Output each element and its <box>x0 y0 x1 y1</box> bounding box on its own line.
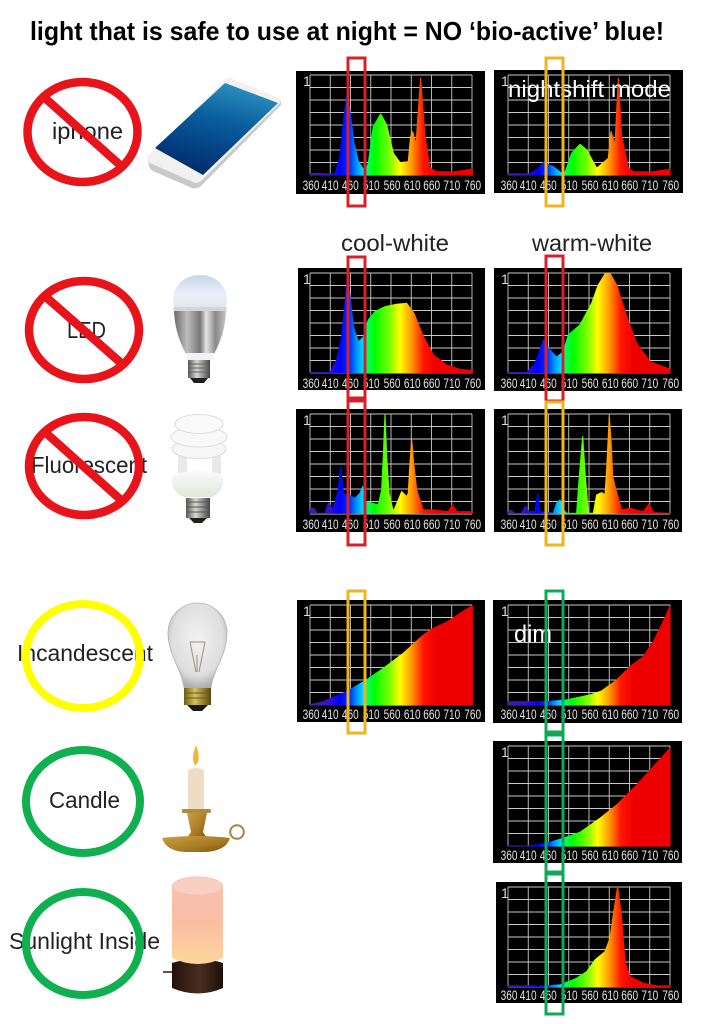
chart: fluorescent warm-white: 1 <box>501 412 509 428</box>
row: Fluorescent label: Fluorescent <box>31 452 148 478</box>
chart: sunlight inside: 610 <box>602 987 619 1003</box>
icon: incandescent bulb <box>168 603 227 711</box>
chart: fluorescent warm-white: 760 <box>662 516 679 532</box>
chart: iphone: 410 <box>322 177 339 193</box>
chart: fluorescent warm-white: 510 <box>561 516 578 532</box>
heading: warm-white: warm-white <box>531 230 652 256</box>
chart: incandescent dim: 1 <box>501 603 509 619</box>
chart: LED cool-white: 560 <box>384 375 401 391</box>
row: LED label <box>29 281 139 379</box>
chart: nightshift mode: 410 <box>520 177 537 193</box>
chart: incandescent dim: 560 <box>582 706 599 722</box>
chart: fluorescent cool-white: 760 <box>464 516 481 532</box>
chart: nightshift mode: nightshift mode <box>508 76 671 102</box>
icon: phone <box>147 78 281 188</box>
chart: incandescent dim: 510 <box>561 706 578 722</box>
chart: sunlight inside: 510 <box>561 987 578 1003</box>
chart: iphone: 510 <box>363 177 380 193</box>
chart: LED warm-white: 360 <box>501 375 518 391</box>
chart: incandescent dim: 760 <box>662 706 679 722</box>
chart: nightshift mode: 360 <box>501 177 518 193</box>
row: Sunlight Inside label <box>9 892 160 995</box>
chart: fluorescent cool-white: 660 <box>423 516 440 532</box>
chart: incandescent: 460 <box>342 706 359 722</box>
chart: fluorescent cool-white: 710 <box>443 516 460 532</box>
chart: LED cool-white: 660 <box>423 375 440 391</box>
row: Fluorescent label <box>29 417 148 515</box>
chart: sunlight inside: 560 <box>582 987 599 1003</box>
chart: sunlight inside: 410 <box>520 987 537 1003</box>
chart: incandescent <box>297 600 485 722</box>
chart: incandescent dim: 460 <box>540 706 557 722</box>
highlight boxes: blue band markers <box>348 58 563 1014</box>
icon: CFL spiral bulb <box>171 414 227 523</box>
chart: nightshift mode <box>494 70 683 193</box>
chart: LED cool-white: 410 <box>322 375 339 391</box>
chart: fluorescent cool-white: 560 <box>384 516 401 532</box>
chart: fluorescent cool-white <box>296 409 485 532</box>
chart: LED warm-white: 660 <box>621 375 638 391</box>
chart: candle: 760 <box>662 847 679 863</box>
chart: sunlight inside: 710 <box>641 987 658 1003</box>
row: Candle label <box>26 750 140 853</box>
chart: incandescent: 560 <box>384 706 401 722</box>
chart: candle: 1 <box>501 744 509 760</box>
chart: iphone: 460 <box>342 177 359 193</box>
chart: nightshift mode: 510 <box>561 177 578 193</box>
row: Incandescent label <box>17 604 154 708</box>
row: iphone label: iphone <box>52 118 123 144</box>
chart: iphone: 660 <box>423 177 440 193</box>
chart: iphone: 1 <box>303 73 311 89</box>
chart: fluorescent cool-white: 610 <box>404 516 421 532</box>
chart: incandescent: 360 <box>303 706 320 722</box>
chart: fluorescent cool-white: 1 <box>303 412 311 428</box>
chart: incandescent dim <box>493 600 682 723</box>
chart: LED warm-white: 710 <box>641 375 658 391</box>
chart: incandescent: 610 <box>404 706 421 722</box>
chart: candle: 410 <box>520 847 537 863</box>
chart: fluorescent cool-white: 410 <box>322 516 339 532</box>
chart: nightshift mode: 1 <box>501 73 509 89</box>
chart: fluorescent warm-white: 460 <box>540 516 557 532</box>
chart: incandescent: 1 <box>303 603 311 619</box>
heading: cool-white: cool-white <box>341 230 449 256</box>
chart: LED cool-white <box>298 268 485 391</box>
chart: LED cool-white: 760 <box>464 375 481 391</box>
chart: LED warm-white: 610 <box>602 375 619 391</box>
chart: candle: 460 <box>540 847 557 863</box>
chart: LED warm-white: 410 <box>520 375 537 391</box>
row: LED label: LED <box>67 317 106 343</box>
chart: iphone: 560 <box>384 177 401 193</box>
chart: nightshift mode: 560 <box>582 177 599 193</box>
chart: sunlight inside: 460 <box>540 987 557 1003</box>
chart: incandescent dim: dim <box>514 621 552 648</box>
chart: LED cool-white: 360 <box>303 375 320 391</box>
chart: fluorescent warm-white: 560 <box>582 516 599 532</box>
chart: LED cool-white: 1 <box>303 271 311 287</box>
chart: incandescent: 410 <box>322 706 339 722</box>
chart: LED warm-white <box>494 268 682 391</box>
row: Incandescent label: Incandescent <box>17 640 154 666</box>
chart: iphone <box>296 71 485 194</box>
icon: LED bulb <box>173 275 227 383</box>
chart: sunlight inside: 1 <box>501 885 509 901</box>
chart: candle: 610 <box>602 847 619 863</box>
chart: LED cool-white: 610 <box>404 375 421 391</box>
chart: candle: 710 <box>641 847 658 863</box>
chart: iphone: 610 <box>404 177 421 193</box>
chart: LED cool-white: 460 <box>342 375 359 391</box>
chart: incandescent: 660 <box>423 706 440 722</box>
chart: incandescent: 510 <box>363 706 380 722</box>
chart: sunlight inside: 660 <box>621 987 638 1003</box>
chart: iphone: 360 <box>303 177 320 193</box>
chart: iphone: 710 <box>443 177 460 193</box>
chart: fluorescent warm-white: 660 <box>621 516 638 532</box>
chart: incandescent: 710 <box>443 706 460 722</box>
icon: candle <box>162 745 244 852</box>
chart: incandescent dim: 660 <box>621 706 638 722</box>
chart: fluorescent warm-white <box>494 409 682 532</box>
chart: candle: 360 <box>501 847 518 863</box>
chart: LED warm-white: 560 <box>582 375 599 391</box>
chart: sunlight inside: 360 <box>501 987 518 1003</box>
chart: LED warm-white: 1 <box>501 271 509 287</box>
row: iphone label <box>28 82 138 182</box>
chart: nightshift mode: 460 <box>540 177 557 193</box>
chart: fluorescent warm-white: 710 <box>641 516 658 532</box>
chart: nightshift mode: 610 <box>602 177 619 193</box>
chart: LED warm-white: 460 <box>540 375 557 391</box>
chart: incandescent dim: 410 <box>520 706 537 722</box>
icon: lamp <box>163 876 223 994</box>
chart: fluorescent cool-white: 510 <box>363 516 380 532</box>
chart: fluorescent warm-white: 410 <box>520 516 537 532</box>
chart: candle: 660 <box>621 847 638 863</box>
chart: LED cool-white: 710 <box>443 375 460 391</box>
row: Candle label: Candle <box>49 787 120 813</box>
chart: nightshift mode: 760 <box>662 177 679 193</box>
chart: incandescent: 760 <box>464 706 481 722</box>
row: Sunlight Inside label: Sunlight Inside <box>9 928 160 954</box>
chart: fluorescent cool-white: 460 <box>342 516 359 532</box>
chart: sunlight inside <box>496 882 682 1003</box>
chart: fluorescent warm-white: 610 <box>602 516 619 532</box>
chart: LED warm-white: 510 <box>561 375 578 391</box>
chart: candle: 560 <box>582 847 599 863</box>
chart: fluorescent cool-white: 360 <box>303 516 320 532</box>
title: light that is safe to use at night = NO ‘bio-active’ blue! <box>30 16 664 46</box>
chart: LED cool-white: 510 <box>363 375 380 391</box>
chart: sunlight inside: 760 <box>662 987 679 1003</box>
chart: iphone: 760 <box>464 177 481 193</box>
chart: incandescent dim: 610 <box>602 706 619 722</box>
chart: incandescent dim: 360 <box>501 706 518 722</box>
chart: nightshift mode: 660 <box>621 177 638 193</box>
chart: LED warm-white: 760 <box>662 375 679 391</box>
chart: fluorescent warm-white: 360 <box>501 516 518 532</box>
chart: candle <box>493 741 682 863</box>
chart: candle: 510 <box>561 847 578 863</box>
chart: nightshift mode: 710 <box>641 177 658 193</box>
chart: incandescent dim: 710 <box>641 706 658 722</box>
